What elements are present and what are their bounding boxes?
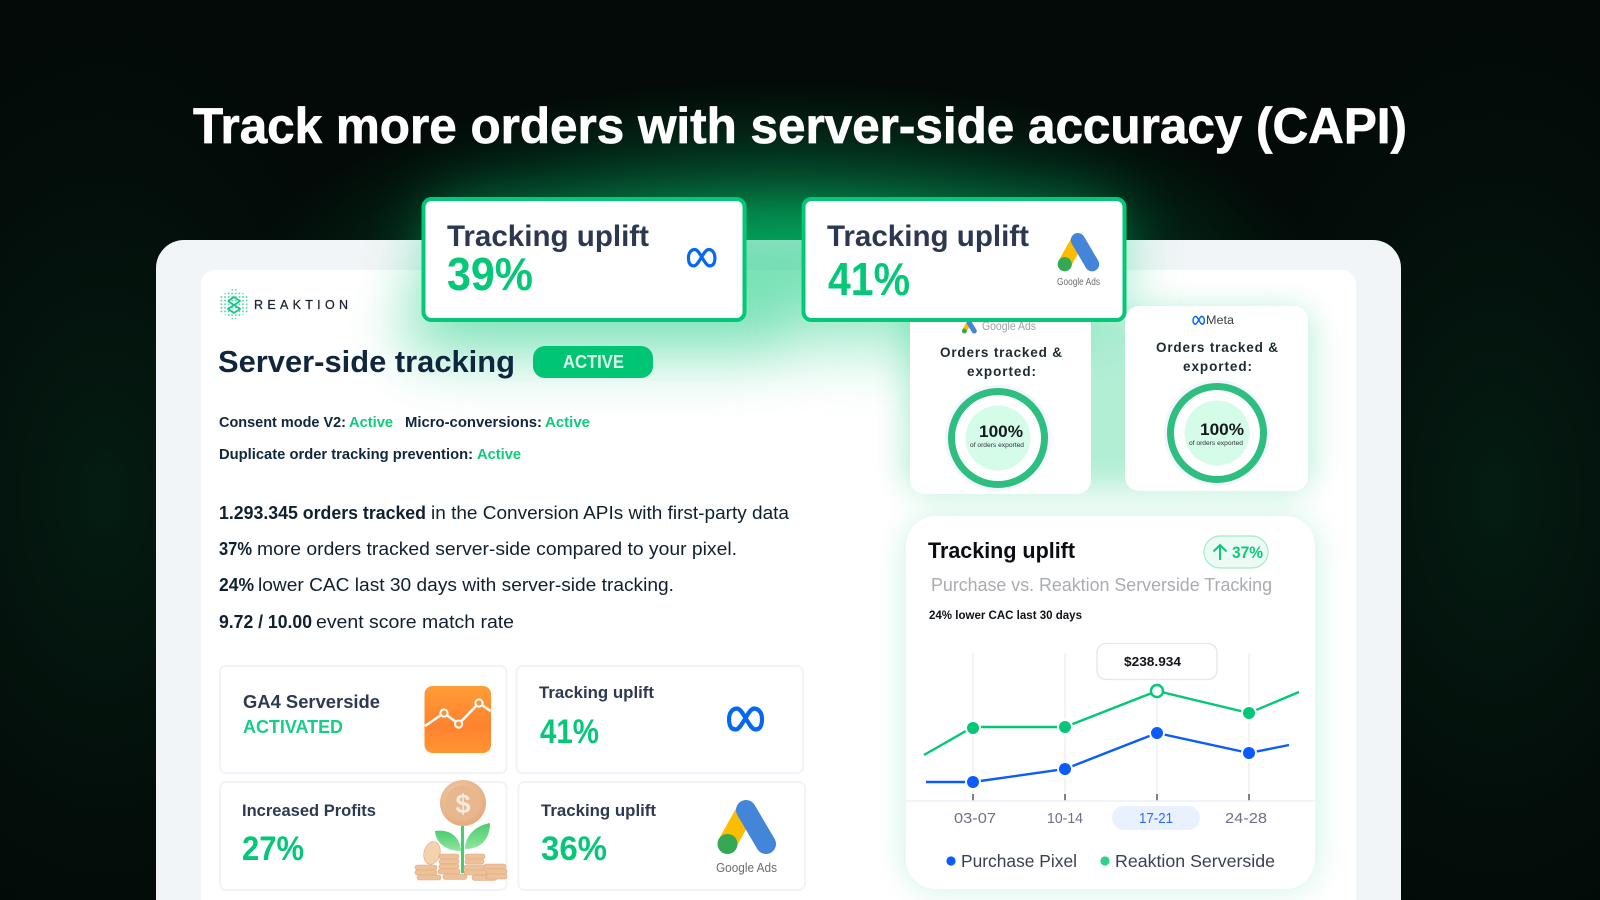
card: tracking uplift meta (516, 666, 803, 773)
icon: google ads: Google Ads (1057, 277, 1100, 288)
key metrics text: in the Conversion APIs with first-party data (431, 502, 790, 523)
highlight card: google ads tracking uplift: Tracking uplift (827, 220, 1029, 253)
legend: Reaktion Serverside (1115, 851, 1275, 871)
icon: meta small (1193, 315, 1235, 327)
panel: tracking uplift chart: 24% lower CAC last 30 days (929, 610, 1082, 622)
card: increased profits: 27% (242, 830, 304, 868)
highlight card: meta tracking uplift: Tracking uplift (447, 220, 649, 253)
key metrics text: 1.293.345 orders tracked (219, 502, 426, 523)
card: google ads orders exported (910, 300, 1091, 494)
icon: money plant (415, 780, 507, 880)
logo: Reaktion (220, 288, 348, 320)
key metrics text (219, 502, 790, 632)
x axis labels: 10-14 (1047, 810, 1083, 827)
status lines: Active (477, 447, 521, 463)
card: GA4 serverside (220, 666, 506, 773)
card: tracking uplift google ads: 36% (541, 830, 607, 868)
legend: Purchase Pixel (961, 851, 1077, 871)
card: tracking uplift meta: Tracking uplift (539, 684, 655, 702)
card: tracking uplift google ads (518, 782, 805, 890)
tooltip (1097, 644, 1217, 680)
icon: google ads small (962, 319, 1036, 334)
heading: server-side tracking: Server-side tracking (218, 344, 515, 379)
icon: google ads (716, 810, 777, 875)
legend (946, 851, 1275, 871)
panel: tracking uplift chart: Tracking uplift (928, 538, 1076, 563)
card: google ads orders exported: Orders tracked & (940, 345, 1062, 360)
status lines: Active (349, 415, 393, 431)
status badge: active (533, 346, 653, 378)
highlight card: meta tracking uplift: 39% (447, 248, 533, 300)
card: google ads orders exported: exported: (967, 364, 1036, 379)
key metrics text: 24% (219, 574, 254, 595)
key metrics text: 37% (219, 538, 252, 559)
key metrics text: 9.72 / 10.00 (219, 611, 312, 632)
glow behind highlighted cards (400, 205, 1315, 888)
x axis labels: 03-07 (954, 810, 996, 827)
icon: google ads (1057, 240, 1100, 288)
card: tracking uplift meta: 41% (540, 713, 599, 751)
key metrics text: lower CAC last 30 days with server-side tracking. (258, 574, 674, 595)
icon: money plant: $ (456, 789, 471, 819)
status lines: Duplicate order tracking prevention: (219, 447, 473, 463)
progress ring (945, 385, 1051, 491)
highlight card: google ads tracking uplift (804, 199, 1124, 320)
status lines: Active (545, 415, 590, 431)
card: tracking uplift google ads: Tracking uplift (541, 802, 657, 820)
status lines (219, 415, 590, 463)
status lines: Micro-conversions: (405, 415, 542, 431)
highlight card: meta tracking uplift (424, 199, 744, 320)
x axis labels: 17-21 (1139, 810, 1173, 827)
panel: tracking uplift chart (906, 516, 1315, 889)
status lines: Consent mode V2: (219, 415, 346, 431)
icon: meta (688, 250, 715, 266)
progress ring: of orders exported (970, 443, 1024, 449)
card: increased profits: Increased Profits (242, 802, 376, 820)
icon: orange chart (424, 686, 491, 753)
icon: meta (729, 709, 762, 729)
x axis labels: 24-28 (1225, 810, 1267, 827)
uplift pill (1204, 536, 1268, 568)
icon: meta small: Meta (1206, 315, 1235, 327)
icon: google ads small: Google Ads (982, 319, 1036, 333)
line chart (906, 644, 1315, 830)
uplift pill: 37% (1232, 543, 1263, 562)
card: GA4 serverside: ACTIVATED (243, 717, 343, 737)
x axis labels (954, 806, 1267, 830)
logo: Reaktion: REAKTION (254, 298, 348, 312)
panel: dashboard (156, 240, 1401, 900)
card: meta orders exported: Orders tracked & (1156, 340, 1278, 355)
icon: google ads: Google Ads (716, 860, 777, 875)
title: Track more orders with server-side accuracy (CAPI) (193, 98, 1407, 154)
progress ring: 100% (1200, 420, 1244, 439)
highlight card: google ads tracking uplift: 41% (828, 253, 910, 305)
key metrics text: event score match rate (316, 611, 514, 632)
panel: tracking uplift chart: Purchase vs. Reaktion Serverside Tracking (931, 575, 1272, 595)
tooltip: $238.934 (1124, 655, 1181, 669)
progress ring: of orders exported (1189, 441, 1243, 447)
card: meta orders exported (1125, 306, 1308, 491)
progress ring (1164, 380, 1270, 486)
card: increased profits (220, 780, 507, 890)
card: GA4 serverside: GA4 Serverside (243, 692, 380, 712)
progress ring: 100% (979, 422, 1023, 441)
key metrics text: more orders tracked server-side compared to your pixel. (257, 538, 737, 559)
card: meta orders exported: exported: (1183, 359, 1252, 374)
status badge: active: ACTIVE (563, 352, 624, 372)
